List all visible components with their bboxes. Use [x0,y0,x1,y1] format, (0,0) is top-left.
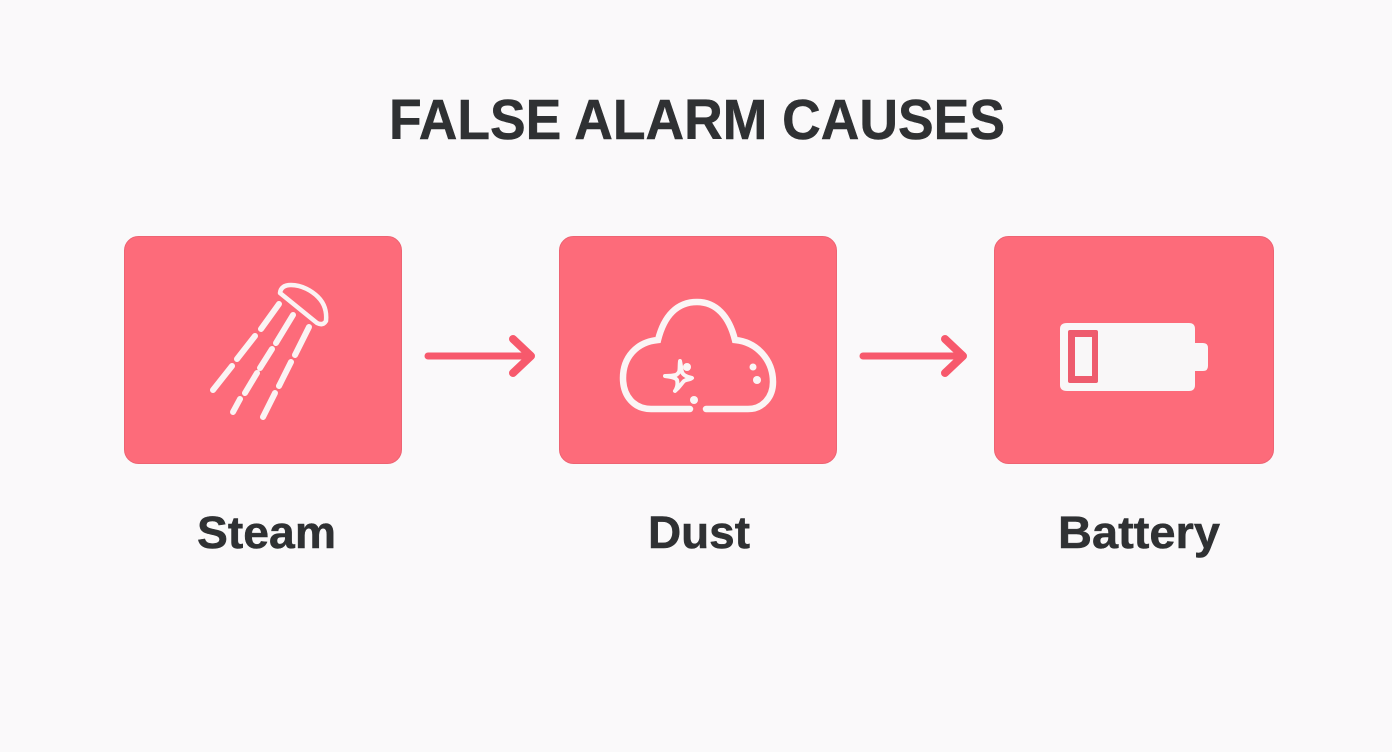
label: dust: Dust [648,507,750,558]
arrow: dust to battery [863,339,963,373]
panel: battery card [994,236,1274,464]
label: steam: Steam [197,507,336,558]
label: battery: Battery [1058,507,1220,558]
panel: steam card [124,236,402,464]
icon: shower with steam [213,285,326,417]
title: FALSE ALARM CAUSES [389,88,1005,152]
icon: dust cloud [623,302,773,409]
icon: low battery [1060,323,1208,391]
panel: dust card [560,236,836,464]
arrow: steam to dust [428,339,531,373]
